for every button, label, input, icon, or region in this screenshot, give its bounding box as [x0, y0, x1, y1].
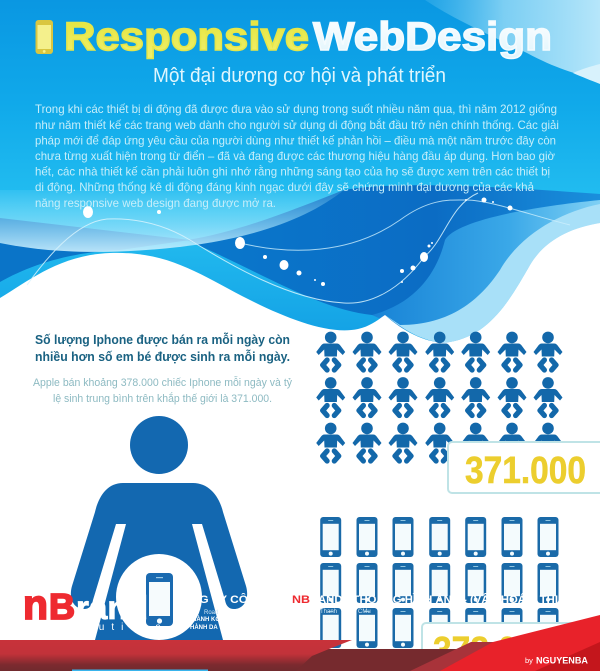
intro paragraph: hết, các nhà thiết kế cần phải luôn ghi nhớ rằng những sáng tạo của họ sẽ được xem trên các thiết bị: [35, 164, 550, 178]
intro paragraph: di động. Những thống kê di động đáng kinh ngạc dưới đây sẽ chứng minh đại dương của các khả: [35, 180, 534, 194]
watermark: company details: CMu: [358, 609, 371, 615]
title: [64, 15, 552, 59]
watermark: company details: [173, 593, 558, 631]
heading: iphones vs babies: Số lượng Iphone được bán ra mỗi ngày còn: [35, 332, 290, 347]
chart: babies pictogram: [316, 332, 562, 461]
icon: woman figure: [71, 416, 247, 640]
watermark: company details: Road: [204, 610, 218, 616]
intro paragraph: như năm thiết kế các trang web dành cho người sử dụng di động bắt đầu trở nên chính thống. Các giải: [35, 117, 559, 132]
heading: iphones vs babies: [35, 332, 290, 364]
watermark: company details: AND - THOÁNG HÌNH ẢNH - (VẬN HOÁ) - THI: [318, 593, 558, 606]
watermark: company details: HÀNH DA: [190, 624, 218, 631]
watermark: company details: Thanh: [320, 609, 337, 615]
supporting text: lệ sinh trung bình trên khắp thế giới là 371.000.: [53, 392, 272, 405]
heading: iphones vs babies: nhiều hơn số em bé được sinh ra mỗi ngày.: [35, 349, 290, 364]
title: WebDesign: [313, 15, 552, 59]
watermark: brand logo: solutions: [65, 622, 167, 633]
icon: phone inside belly circle: [116, 554, 202, 640]
intro paragraph: chưa từng xuất hiện trong từ điển – đã và đang được các thương hiệu hàng đầu áp dụng. Hơn bao giờ: [35, 149, 555, 163]
watermark: brand logo: [23, 581, 167, 633]
intro paragraph: pháp mới để đáp ứng yêu cầu của người dùng như thiết kế phản hồi – điều mà một năm trước đây còn: [35, 134, 556, 148]
watermark: brand logo: B: [49, 586, 75, 627]
credit: by NGUYENBA: NGUYENBA: [536, 656, 588, 666]
icon: yellow phone: [36, 20, 53, 54]
footer banner: [0, 615, 600, 671]
credit: by NGUYENBA: by: [525, 656, 533, 665]
supporting text: Apple bán khoảng 378.000 chiếc Iphone mỗi ngày và tỷ: [33, 376, 293, 389]
watermark: company details: CÔNG TY CÔ: [173, 593, 248, 606]
intro paragraph: Trong khi các thiết bị di động đã được đưa vào sử dụng trong suốt nhiều năm qua, thì năm 2012 giống: [35, 102, 557, 116]
watermark: company details: NB: [292, 594, 310, 606]
watermark: brand logo: rand: [76, 589, 148, 626]
supporting text: [33, 376, 293, 405]
callout: 378.000: [422, 623, 600, 671]
subtitle: Một đại dương cơ hội và phát triển: [153, 65, 446, 87]
watermark: company details: HÀNH KO: [192, 616, 220, 623]
intro paragraph: năng responsive web design đang được mở ra.: [35, 196, 276, 210]
callout: 378.000: 378.000: [433, 630, 554, 671]
callout: 371.000: 371.000: [465, 450, 586, 492]
chart: iphones pictogram: [320, 517, 558, 648]
watermark: brand logo: n: [23, 581, 48, 628]
title: Responsive: [64, 15, 309, 59]
intro paragraph: [35, 102, 559, 210]
